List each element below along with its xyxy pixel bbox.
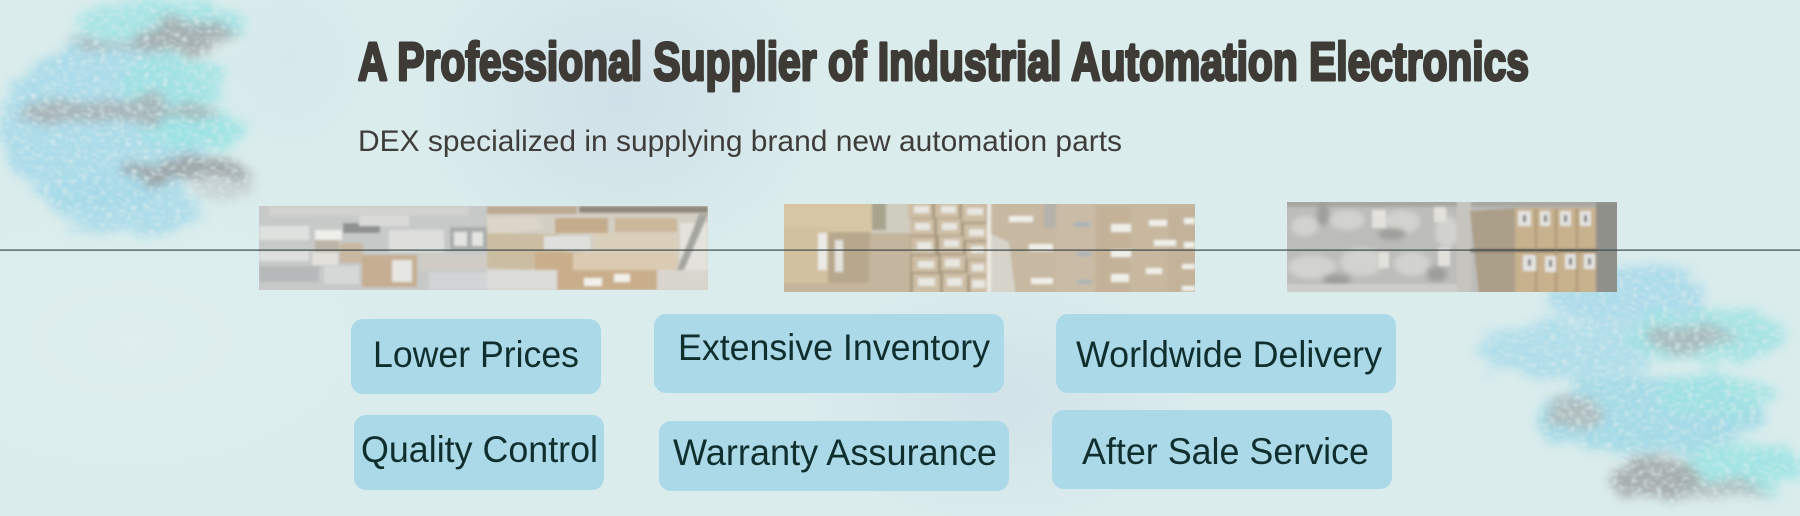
button: Warranty Assurance: [659, 421, 1009, 491]
decoration: left brush stroke: [0, 0, 253, 233]
horizontal rule: [0, 250, 1800, 251]
button: Warranty Assurance: Warranty Assurance: [673, 432, 997, 473]
button: Worldwide Delivery: [1056, 314, 1396, 393]
photo: wrapped parts and cartons on pallet: [1287, 202, 1617, 292]
button: Lower Prices: Lower Prices: [373, 334, 579, 375]
photo: stacked labelled cartons: [784, 204, 1195, 292]
button: Quality Control: [354, 415, 604, 490]
button: Extensive Inventory: [654, 314, 1004, 393]
button: Quality Control: Quality Control: [361, 429, 598, 470]
button: After Sale Service: [1052, 410, 1392, 489]
button: Extensive Inventory: Extensive Inventory: [678, 327, 990, 368]
decoration: right brush stroke: [1480, 265, 1800, 500]
button: After Sale Service: After Sale Service: [1082, 431, 1369, 472]
button: Lower Prices: [351, 319, 601, 394]
subtitle: DEX specialized in supplying brand new automation parts: [358, 125, 1122, 158]
button: Worldwide Delivery: Worldwide Delivery: [1076, 334, 1382, 375]
photo: parts and boxes in warehouse: [259, 206, 708, 290]
